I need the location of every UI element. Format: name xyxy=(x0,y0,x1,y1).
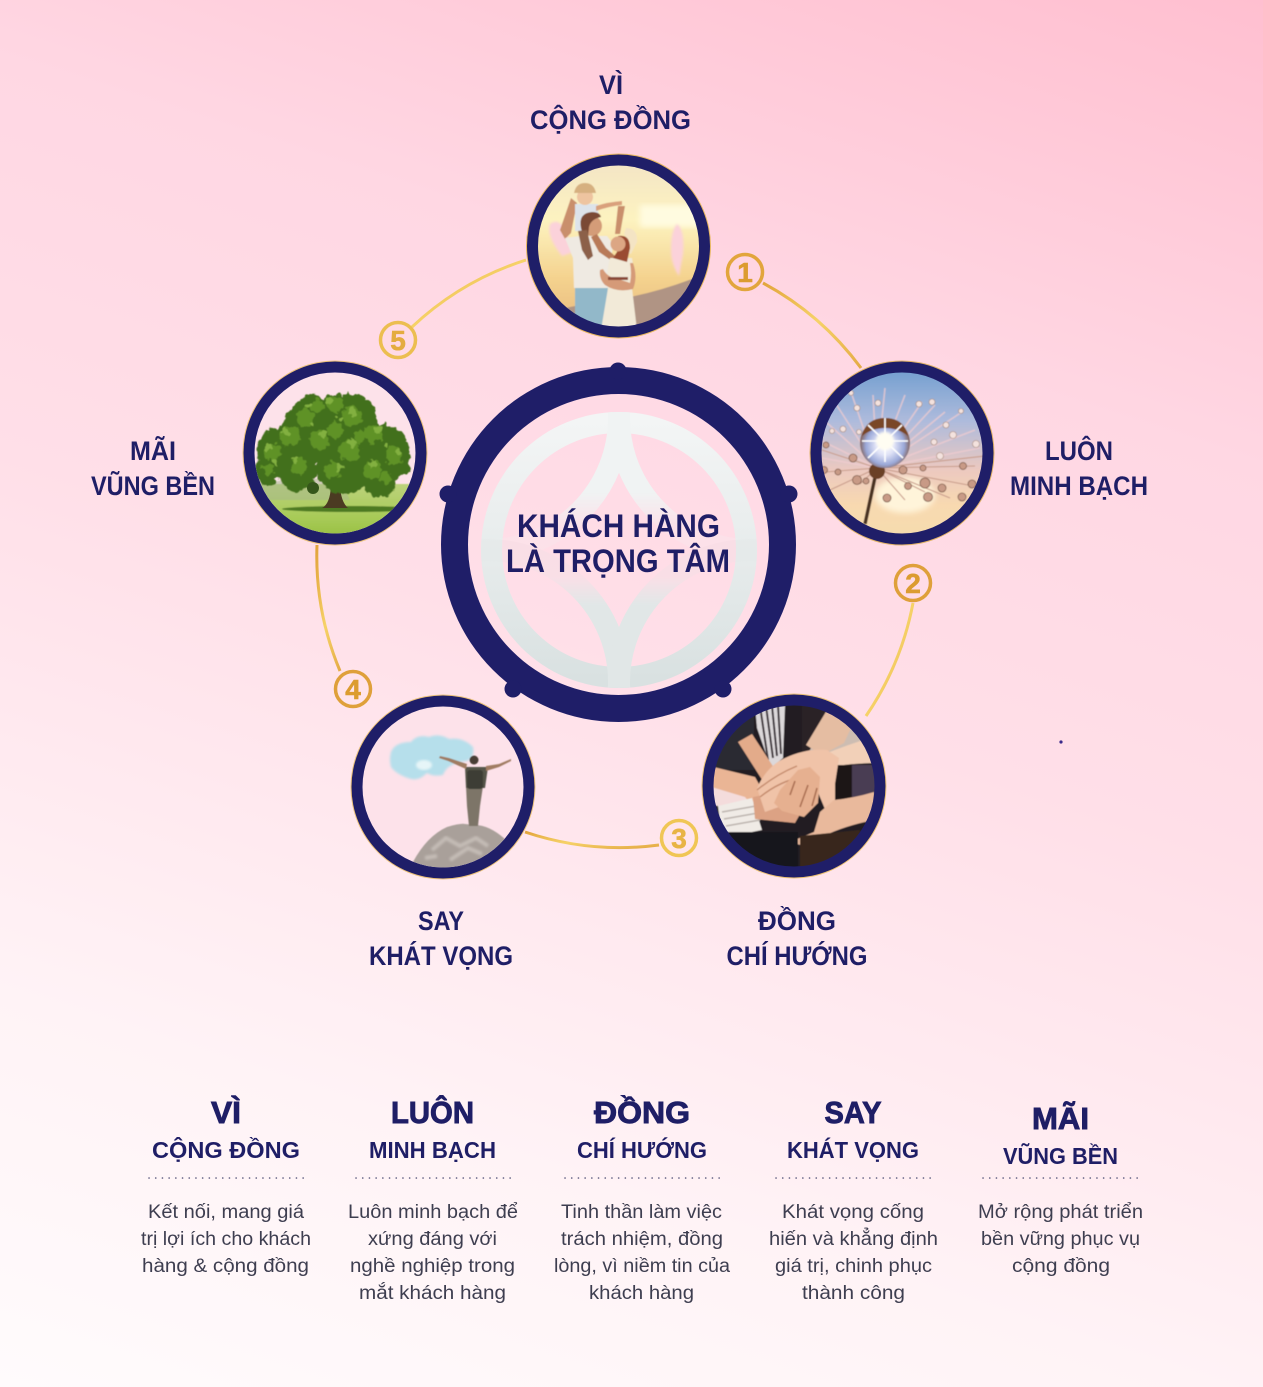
column: say khát vọng: Khát vọng cống xyxy=(782,1202,924,1223)
badge 5: 5 xyxy=(390,325,406,356)
label: say khát vọng xyxy=(369,906,513,971)
label: vì cộng đồng: CỘNG ĐỒNG xyxy=(530,104,691,135)
woman dress xyxy=(601,258,637,330)
label: đồng chí hướng xyxy=(726,905,868,971)
child head xyxy=(576,192,594,206)
badge 5 xyxy=(380,322,416,358)
emblem: faint logo mark xyxy=(481,412,757,688)
photo circle: family xyxy=(526,154,711,338)
column: vì cộng đồng xyxy=(141,1095,311,1277)
label: luôn minh bạch: MINH BẠCH xyxy=(1010,471,1148,501)
man head xyxy=(588,217,602,237)
column: đồng chí hướng: CHÍ HƯỚNG xyxy=(577,1136,707,1163)
column: mãi vững bền: VŨNG BỀN xyxy=(1003,1142,1118,1169)
label: luôn minh bạch xyxy=(1010,435,1148,501)
column: đồng chí hướng: trách nhiệm, đồng xyxy=(561,1229,723,1250)
column: đồng chí hướng: Tinh thần làm việc xyxy=(561,1202,722,1223)
column: luôn minh bạch: Luôn minh bạch để xyxy=(348,1202,518,1223)
column: luôn minh bạch xyxy=(348,1094,518,1304)
label: mãi vững bền: VŨNG BỀN xyxy=(91,470,215,501)
label: say khát vọng: KHÁT VỌNG xyxy=(369,940,513,971)
photo circle: man on mountain xyxy=(350,694,536,880)
label: đồng chí hướng: CHÍ HƯỚNG xyxy=(726,940,868,971)
column: say khát vọng: thành công xyxy=(802,1283,905,1304)
column: say khát vọng: KHÁT VỌNG xyxy=(787,1136,919,1163)
label: luôn minh bạch: LUÔN xyxy=(1045,435,1113,466)
emblem: title: KHÁCH HÀNG xyxy=(517,508,720,544)
column: say khát vọng: giá trị, chinh phục xyxy=(775,1256,932,1277)
column: mãi vững bền: MÃI xyxy=(1032,1101,1089,1136)
infographic canvas xyxy=(91,70,1146,1303)
column: đồng chí hướng: khách hàng xyxy=(589,1283,694,1304)
man torso xyxy=(565,236,613,288)
emblem: navy ring with knobs xyxy=(440,362,798,722)
child legs xyxy=(578,230,593,260)
photo circle: water drop dandelion xyxy=(810,360,994,546)
column: vì cộng đồng: VÌ xyxy=(211,1095,241,1130)
column: đồng chí hướng: lòng, vì niềm tin của xyxy=(554,1256,730,1277)
column: say khát vọng: hiến và khẳng định xyxy=(769,1228,938,1250)
label: mãi vững bền xyxy=(91,435,215,501)
central emblem xyxy=(440,362,798,722)
column: đồng chí hướng xyxy=(554,1094,730,1304)
column: vì cộng đồng: Kết nối, mang giá xyxy=(148,1202,304,1223)
column: luôn minh bạch: mắt khách hàng xyxy=(359,1282,506,1304)
column: say khát vọng xyxy=(769,1095,938,1304)
man jeans xyxy=(574,288,608,325)
column: say khát vọng: SAY xyxy=(824,1095,882,1130)
photo circle: joined hands xyxy=(702,694,886,878)
badge 2: 2 xyxy=(905,568,921,599)
child torso and arm xyxy=(575,204,599,231)
column: luôn minh bạch: nghề nghiệp trong xyxy=(350,1256,515,1277)
badge 4 xyxy=(336,672,370,706)
badge 1: 1 xyxy=(737,257,753,288)
column: mãi vững bền xyxy=(978,1101,1143,1277)
column: đồng chí hướng: ĐỒNG xyxy=(594,1094,690,1130)
label: vì cộng đồng: VÌ xyxy=(599,69,623,100)
column: mãi vững bền: Mở rộng phát triển xyxy=(978,1202,1143,1223)
column: luôn minh bạch: xứng đáng với xyxy=(368,1229,497,1250)
column: luôn minh bạch: LUÔN xyxy=(391,1094,474,1130)
label: say khát vọng: SAY xyxy=(418,906,464,936)
connector arcs between circles xyxy=(317,260,913,848)
column: luôn minh bạch: MINH BẠCH xyxy=(369,1137,496,1163)
label: mãi vững bền: MÃI xyxy=(130,435,176,466)
column: mãi vững bền: cộng đồng xyxy=(1012,1256,1110,1277)
column: vì cộng đồng: hàng & cộng đồng xyxy=(142,1256,309,1277)
column: mãi vững bền: bền vững phục vụ xyxy=(981,1229,1140,1250)
label: đồng chí hướng: ĐỒNG xyxy=(758,905,836,936)
column: vì cộng đồng: trị lợi ích cho khách xyxy=(141,1229,311,1250)
man raised arms xyxy=(560,198,577,239)
badge 3 xyxy=(662,820,696,856)
emblem: title: LÀ TRỌNG TÂM xyxy=(506,543,730,579)
photo circle: big tree xyxy=(242,360,428,546)
badge 3: 3 xyxy=(671,823,687,854)
label: vì cộng đồng xyxy=(530,69,691,135)
badge 1 xyxy=(728,254,762,290)
badge 2 xyxy=(896,566,930,600)
emblem: title xyxy=(506,508,730,579)
woman head and hat xyxy=(624,228,637,254)
column: vì cộng đồng: CỘNG ĐỒNG xyxy=(152,1136,300,1163)
badge 4: 4 xyxy=(345,674,361,705)
